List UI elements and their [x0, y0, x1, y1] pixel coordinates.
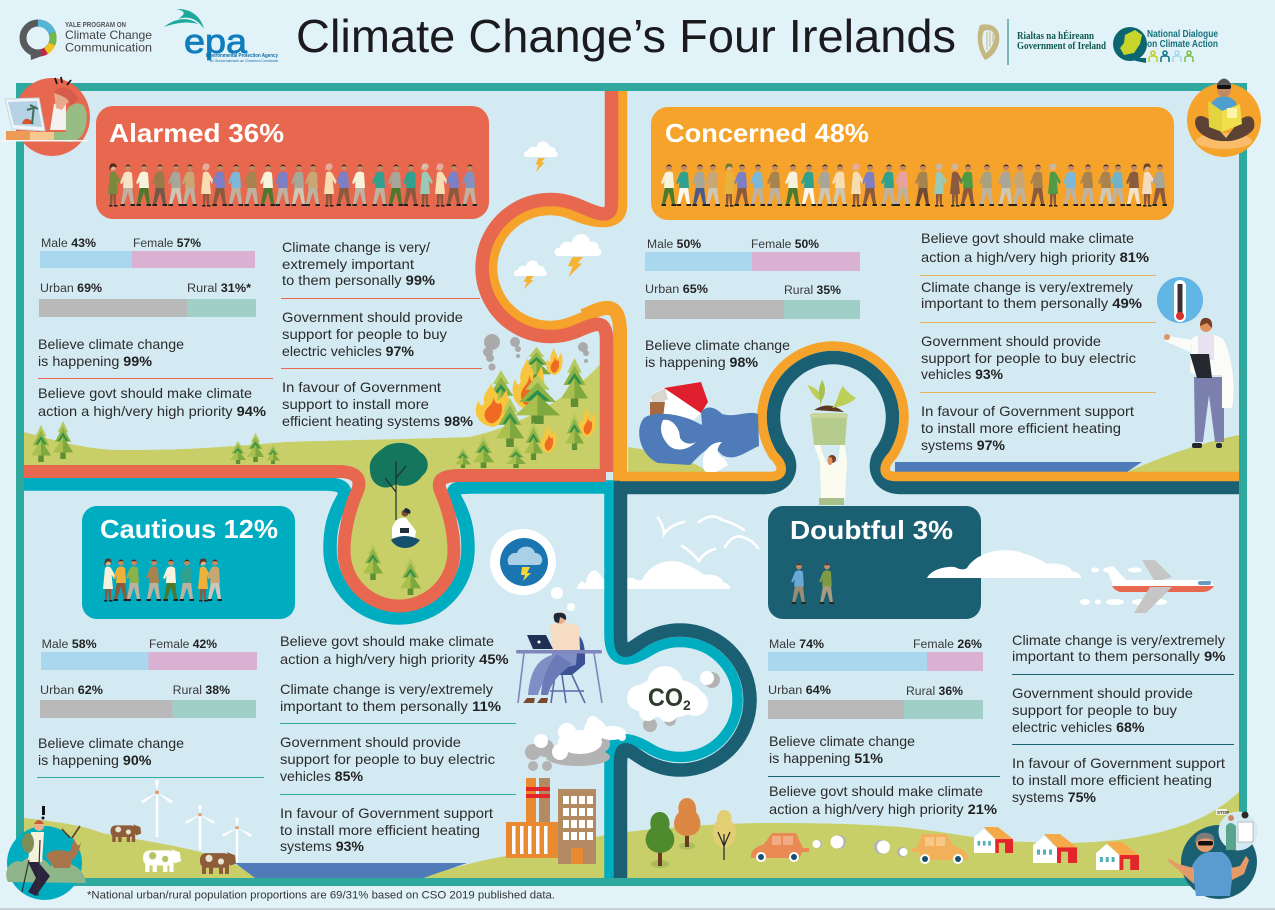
- header box: Doubtful 3%: [768, 506, 981, 619]
- illustration: person holding plant: [807, 380, 856, 505]
- logo: National Dialogue on Climate Action: [1113, 27, 1218, 63]
- stat text: right column: electric vehicles 97%: [282, 343, 415, 359]
- illustration: birds: [658, 516, 758, 561]
- stat text: right column: In favour of Government support: [280, 805, 493, 821]
- illustration: cows: [111, 824, 236, 874]
- illustration: alarmed knob clouds with lightning: [514, 141, 602, 289]
- gender bar: Male 58%: [42, 639, 97, 651]
- stat text: right column: support for people to buy electric: [280, 751, 495, 767]
- illustration: CO2 cloud: 2: [683, 697, 691, 713]
- band: alarmed red: [482, 91, 612, 472]
- car orange: [751, 833, 809, 862]
- header box: Cautious 12%: Cautious 12%: [100, 514, 278, 544]
- stat text: right column: Climate change is very/extremely: [280, 681, 493, 697]
- stat text: right column: Climate change is very/extremely: [1012, 632, 1225, 648]
- smoke: [483, 334, 589, 371]
- stat text: right column: Government should provide: [921, 333, 1101, 349]
- stat text: left column: [37, 735, 264, 778]
- gender bar: Female 42%: [149, 639, 217, 651]
- persona: shrugging person with protesters: [1168, 809, 1257, 899]
- stat text: right column: Government should provide: [1012, 685, 1193, 701]
- illustration: flooded house and waves: [639, 382, 759, 472]
- gender bar: [40, 238, 255, 268]
- stat text: right column: systems 93%: [280, 838, 365, 854]
- icon: storm cloud thought bubble: [490, 529, 575, 611]
- illustration: CO2 cloud: [627, 666, 720, 732]
- urban rural bar: Rural 38%: [173, 685, 230, 697]
- sky decoration clouds: [577, 561, 730, 589]
- stat text: right column: Climate change is very/: [282, 239, 430, 255]
- people row: concerned: [661, 163, 1167, 206]
- logo: Environmental Protection Agency: Environmental Protection Agency: [206, 53, 278, 59]
- gender bar: Male 74%: [769, 639, 824, 651]
- exhaust: [812, 835, 908, 857]
- stat text: right column: to install more efficient heating: [1012, 772, 1212, 788]
- people row: alarmed: [108, 163, 477, 206]
- illustration: forest fire: [455, 334, 596, 468]
- cloud: cautious edge: [577, 570, 611, 589]
- logo: Government of Ireland harp: Government of Ireland: [1017, 41, 1106, 52]
- panel: Cautious: [6, 506, 626, 900]
- stat text: left column: Believe climate change: [645, 337, 790, 353]
- urban rural bar: [645, 284, 860, 319]
- stat text: right column: to install more efficient heating: [280, 822, 480, 838]
- stat text: right column: Government should provide: [280, 734, 461, 750]
- stat text: right column: support for people to buy electric: [921, 350, 1136, 366]
- stat text: right column: to install more efficient heating: [921, 420, 1121, 436]
- stat text: right column: support for people to buy: [282, 326, 447, 342]
- car yellow: [912, 834, 968, 864]
- stat text: left column: is happening 51%: [769, 750, 884, 766]
- stat text: left column: is happening 98%: [645, 354, 759, 370]
- illustration: person under tree in keyhole: [363, 443, 428, 595]
- illustration: doctor with clipboard: [1164, 318, 1234, 448]
- logo: Yale Program on Climate Change Communication: Communication: [65, 40, 152, 54]
- band: doubtful cyan knob: [610, 481, 738, 878]
- stat text: left column: Believe climate change: [38, 735, 184, 751]
- band: alarmed red horizontal: [24, 472, 606, 606]
- persona: alarmed person at computer: [0, 77, 90, 156]
- logo: Environmental Protection Agency: An Ghníomhaireacht um Chaomhnú Comhshaoil: [210, 58, 278, 63]
- stat text: left column: [38, 336, 273, 419]
- stat text: right column: In favour of Government support: [1012, 755, 1225, 771]
- illustration: houses: [974, 827, 1139, 870]
- landscape ground: [24, 360, 1239, 878]
- band: cautious cyan horizontal: [24, 484, 614, 618]
- logo: National Dialogue on Climate Action: National Dialogue: [1147, 29, 1218, 40]
- stat text: right column: Believe govt should make climate: [280, 633, 494, 649]
- urban rural bar: Urban 62%: [40, 685, 103, 697]
- urban rural bar: Rural 35%: [784, 285, 841, 297]
- illustration: wind turbines: [141, 780, 252, 863]
- persona: person reading book: [1187, 78, 1261, 157]
- panel: Alarmed: [0, 77, 489, 429]
- persona: hiker with deer: [6, 806, 86, 900]
- stat text: right column: action a high/very high priority 45%: [280, 651, 509, 667]
- stat text: right column: important to them personally 49%: [921, 295, 1143, 311]
- ground: cautious: [24, 818, 255, 878]
- stat text: right column: action a high/very high priority 81%: [921, 249, 1150, 265]
- stat text: right column: electric vehicles 68%: [1012, 719, 1145, 735]
- panel: Concerned: [639, 78, 1261, 505]
- illustration: trees: [646, 798, 736, 868]
- logo: Yale Program on Climate Change Communication: [23, 22, 152, 60]
- urban rural bar: Urban 64%: [768, 685, 831, 697]
- stat text: right column: In favour of Government support: [921, 403, 1134, 419]
- header logos and title: [23, 9, 1218, 65]
- footnote: *National urban/rural population proportions are 69/31% based on CSO 2019 published data.: [87, 890, 555, 902]
- burning pines: [522, 347, 551, 380]
- stat text: right column: to them personally 99%: [282, 272, 436, 288]
- stat text: right column: vehicles 93%: [921, 366, 1004, 382]
- people row: cautious: [103, 558, 222, 602]
- gender bar: Male 43%: [41, 238, 96, 250]
- stat text: right column: [281, 239, 482, 429]
- stat text: left column: [645, 337, 790, 370]
- gender bar: Male 50%: [647, 239, 701, 251]
- illustration: airplane: [1080, 560, 1214, 613]
- icon: thermometer: [1157, 277, 1203, 323]
- cloud: doubtful left: [612, 561, 730, 589]
- stat text: right column: Believe govt should make climate: [921, 230, 1134, 246]
- logo: Government of Ireland harp: Rialtas na hÉireann: [1017, 30, 1094, 42]
- stat text: left column: Believe climate change: [38, 336, 184, 352]
- header box: Doubtful 3%: Doubtful 3%: [790, 515, 953, 545]
- urban rural bar: Rural 31%*: [187, 283, 252, 295]
- smoke: [525, 716, 626, 771]
- people row: doubtful: [791, 563, 834, 604]
- gender bar: [645, 239, 860, 271]
- illustration: woman at laptop desk: [516, 612, 602, 703]
- stat text: left column: action a high/very high priority 94%: [38, 403, 267, 419]
- stat text: right column: [280, 633, 516, 854]
- band: concerned orange horizontal: [620, 346, 1239, 476]
- logo: Environmental Protection Agency: [164, 9, 278, 63]
- stat text: left column: Believe govt should make climate: [38, 385, 252, 401]
- header box: Concerned 48%: Concerned 48%: [665, 118, 869, 148]
- ground: concerned: [628, 447, 708, 472]
- stat text: left column: [768, 733, 1000, 817]
- stat text: left column: is happening 99%: [38, 353, 153, 369]
- stat text: right column: Climate change is very/extremely: [921, 279, 1133, 295]
- logo: Environmental Protection Agency: epa: [184, 23, 247, 61]
- ground: cautious keyhole: [338, 466, 460, 606]
- gender bar: [768, 639, 983, 671]
- ground: alarmed: [24, 360, 604, 470]
- gender bar: Female 50%: [751, 239, 819, 251]
- illustration: factory with smoke: [506, 716, 626, 864]
- stat text: left column: is happening 90%: [38, 752, 152, 768]
- stat text: right column: systems 75%: [1012, 789, 1097, 805]
- stat text: right column: vehicles 85%: [280, 768, 364, 784]
- stat text: right column: extremely important: [282, 256, 414, 272]
- urban rural bar: [40, 685, 256, 718]
- cloud over header: [927, 550, 1081, 578]
- urban rural bar: Rural 36%: [906, 686, 963, 698]
- stat text: right column: important to them personally 11%: [280, 698, 502, 714]
- stat text: right column: In favour of Government: [282, 379, 441, 395]
- urban rural bar: Urban 69%: [40, 283, 102, 295]
- stat text: right column: support to install more: [282, 396, 429, 412]
- stat text: left column: Believe climate change: [769, 733, 915, 749]
- header box: Cautious 12%: [82, 506, 295, 619]
- persona: shrugging person with protesters: STOP: [1217, 810, 1229, 815]
- stat text: right column: efficient heating systems 98%: [282, 413, 474, 429]
- logo: Yale Program on Climate Change Communication: Climate Change: [65, 28, 152, 42]
- stat text: left column: Believe govt should make climate: [769, 783, 983, 799]
- logo: Yale Program on Climate Change Communication: YALE PROGRAM ON: [65, 22, 126, 29]
- stat text: right column: support for people to buy: [1012, 702, 1177, 718]
- header box: Concerned 48%: [651, 107, 1174, 220]
- stat text: left column: action a high/very high priority 21%: [769, 801, 998, 817]
- ground: doubtful: [627, 792, 1239, 878]
- urban rural bar: [39, 283, 256, 317]
- stat text: right column: important to them personally 9%: [1012, 648, 1226, 664]
- stat text: right column: [920, 230, 1156, 453]
- urban rural bar: Urban 65%: [645, 284, 708, 296]
- title: Climate Change’s Four Irelands: [296, 10, 956, 62]
- panel: Doubtful: [627, 506, 1257, 899]
- illustration: CO2 cloud: CO: [648, 684, 683, 712]
- stat text: right column: systems 97%: [921, 437, 1006, 453]
- urban rural bar: [768, 685, 983, 719]
- stat text: right column: Government should provide: [282, 309, 463, 325]
- header box: Alarmed 36%: [96, 106, 489, 219]
- gender bar: Female 26%: [913, 639, 982, 651]
- stat text: right column: [1012, 632, 1234, 805]
- illustration: left pines on alarmed ground: [31, 421, 280, 464]
- illustration: cars: [751, 833, 968, 864]
- band: concerned orange vertical: [493, 91, 622, 481]
- gender bar: Female 57%: [133, 238, 201, 250]
- logo: Government of Ireland harp: [978, 19, 1106, 65]
- logo: National Dialogue on Climate Action: on Climate Action: [1147, 39, 1218, 50]
- gender bar: [41, 639, 257, 670]
- band: doubtful dark teal: [620, 358, 1239, 878]
- header box: Alarmed 36%: Alarmed 36%: [109, 118, 284, 148]
